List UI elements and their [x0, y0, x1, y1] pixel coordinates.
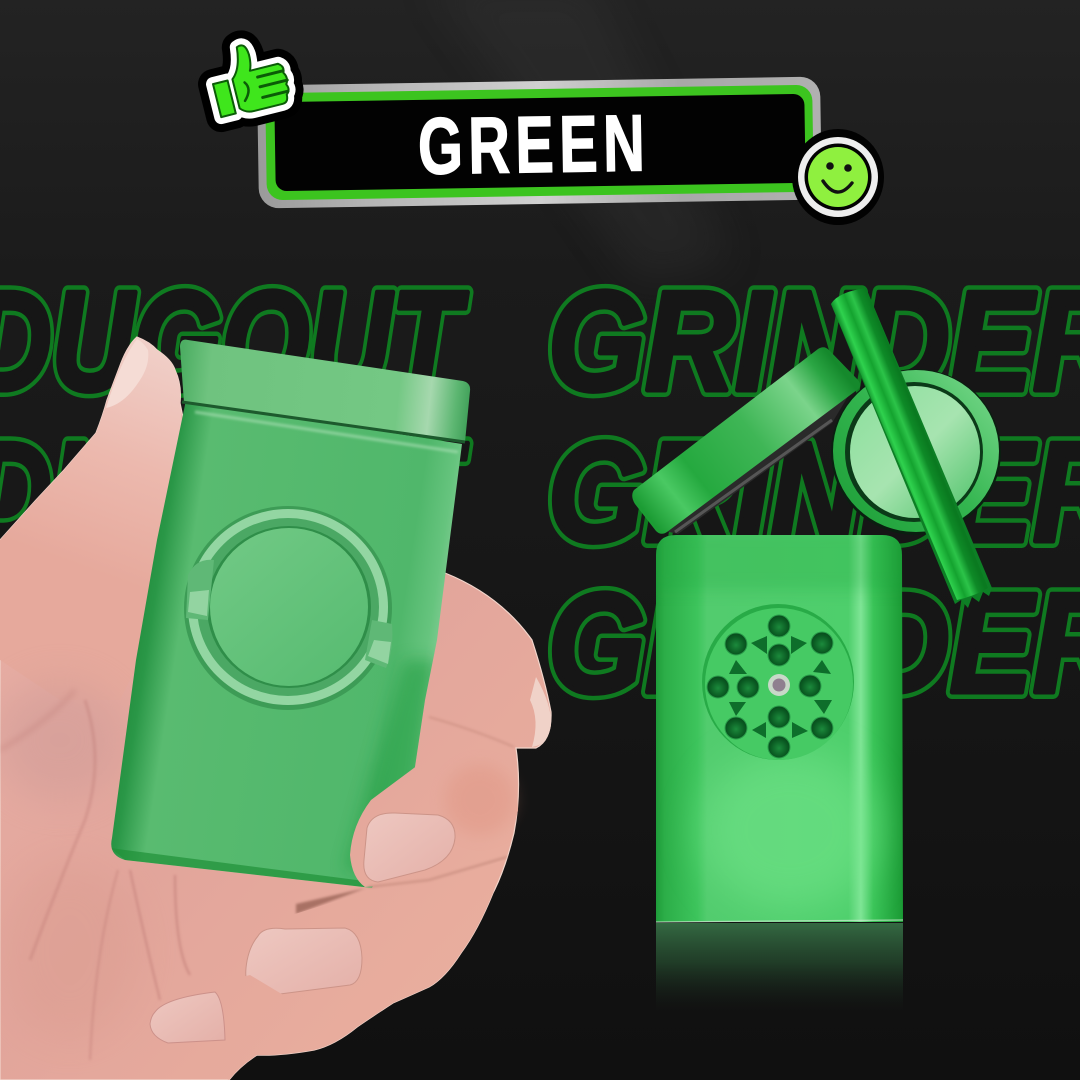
thumb nail — [106, 339, 148, 408]
grinder plate — [702, 604, 854, 760]
finger gap shadow — [368, 857, 507, 887]
joint tube — [831, 288, 992, 608]
middle fingernail — [364, 813, 455, 882]
little fingernail — [150, 992, 225, 1043]
base body — [650, 530, 910, 922]
ring fingernail — [246, 928, 362, 996]
palm shading — [0, 680, 190, 1060]
hand silhouette — [0, 337, 551, 1080]
reflection — [656, 923, 903, 1015]
inner fill layer — [0, 262, 1080, 723]
product: open grinder case — [632, 288, 1001, 1015]
knuckle shading — [445, 765, 515, 835]
ring emblem — [184, 506, 392, 710]
middle finger over case — [350, 735, 518, 887]
outline layer — [0, 262, 1080, 723]
index fingernail — [530, 677, 551, 747]
dugout body — [111, 400, 462, 888]
open lid — [632, 347, 860, 534]
thumb — [0, 337, 190, 700]
dugout lid — [180, 340, 470, 442]
background text: repeated DUGOUT GRINDER outlines — [0, 262, 1080, 723]
finger crease — [429, 717, 514, 747]
title badge — [257, 77, 822, 208]
ring finger — [246, 860, 505, 1005]
title text: GREEN — [417, 98, 651, 191]
hand holding dugout — [0, 337, 551, 1080]
round lid disc — [831, 369, 1001, 535]
icon: smiley — [792, 129, 884, 225]
icon: thumbs up — [206, 36, 293, 119]
little finger — [150, 975, 393, 1080]
